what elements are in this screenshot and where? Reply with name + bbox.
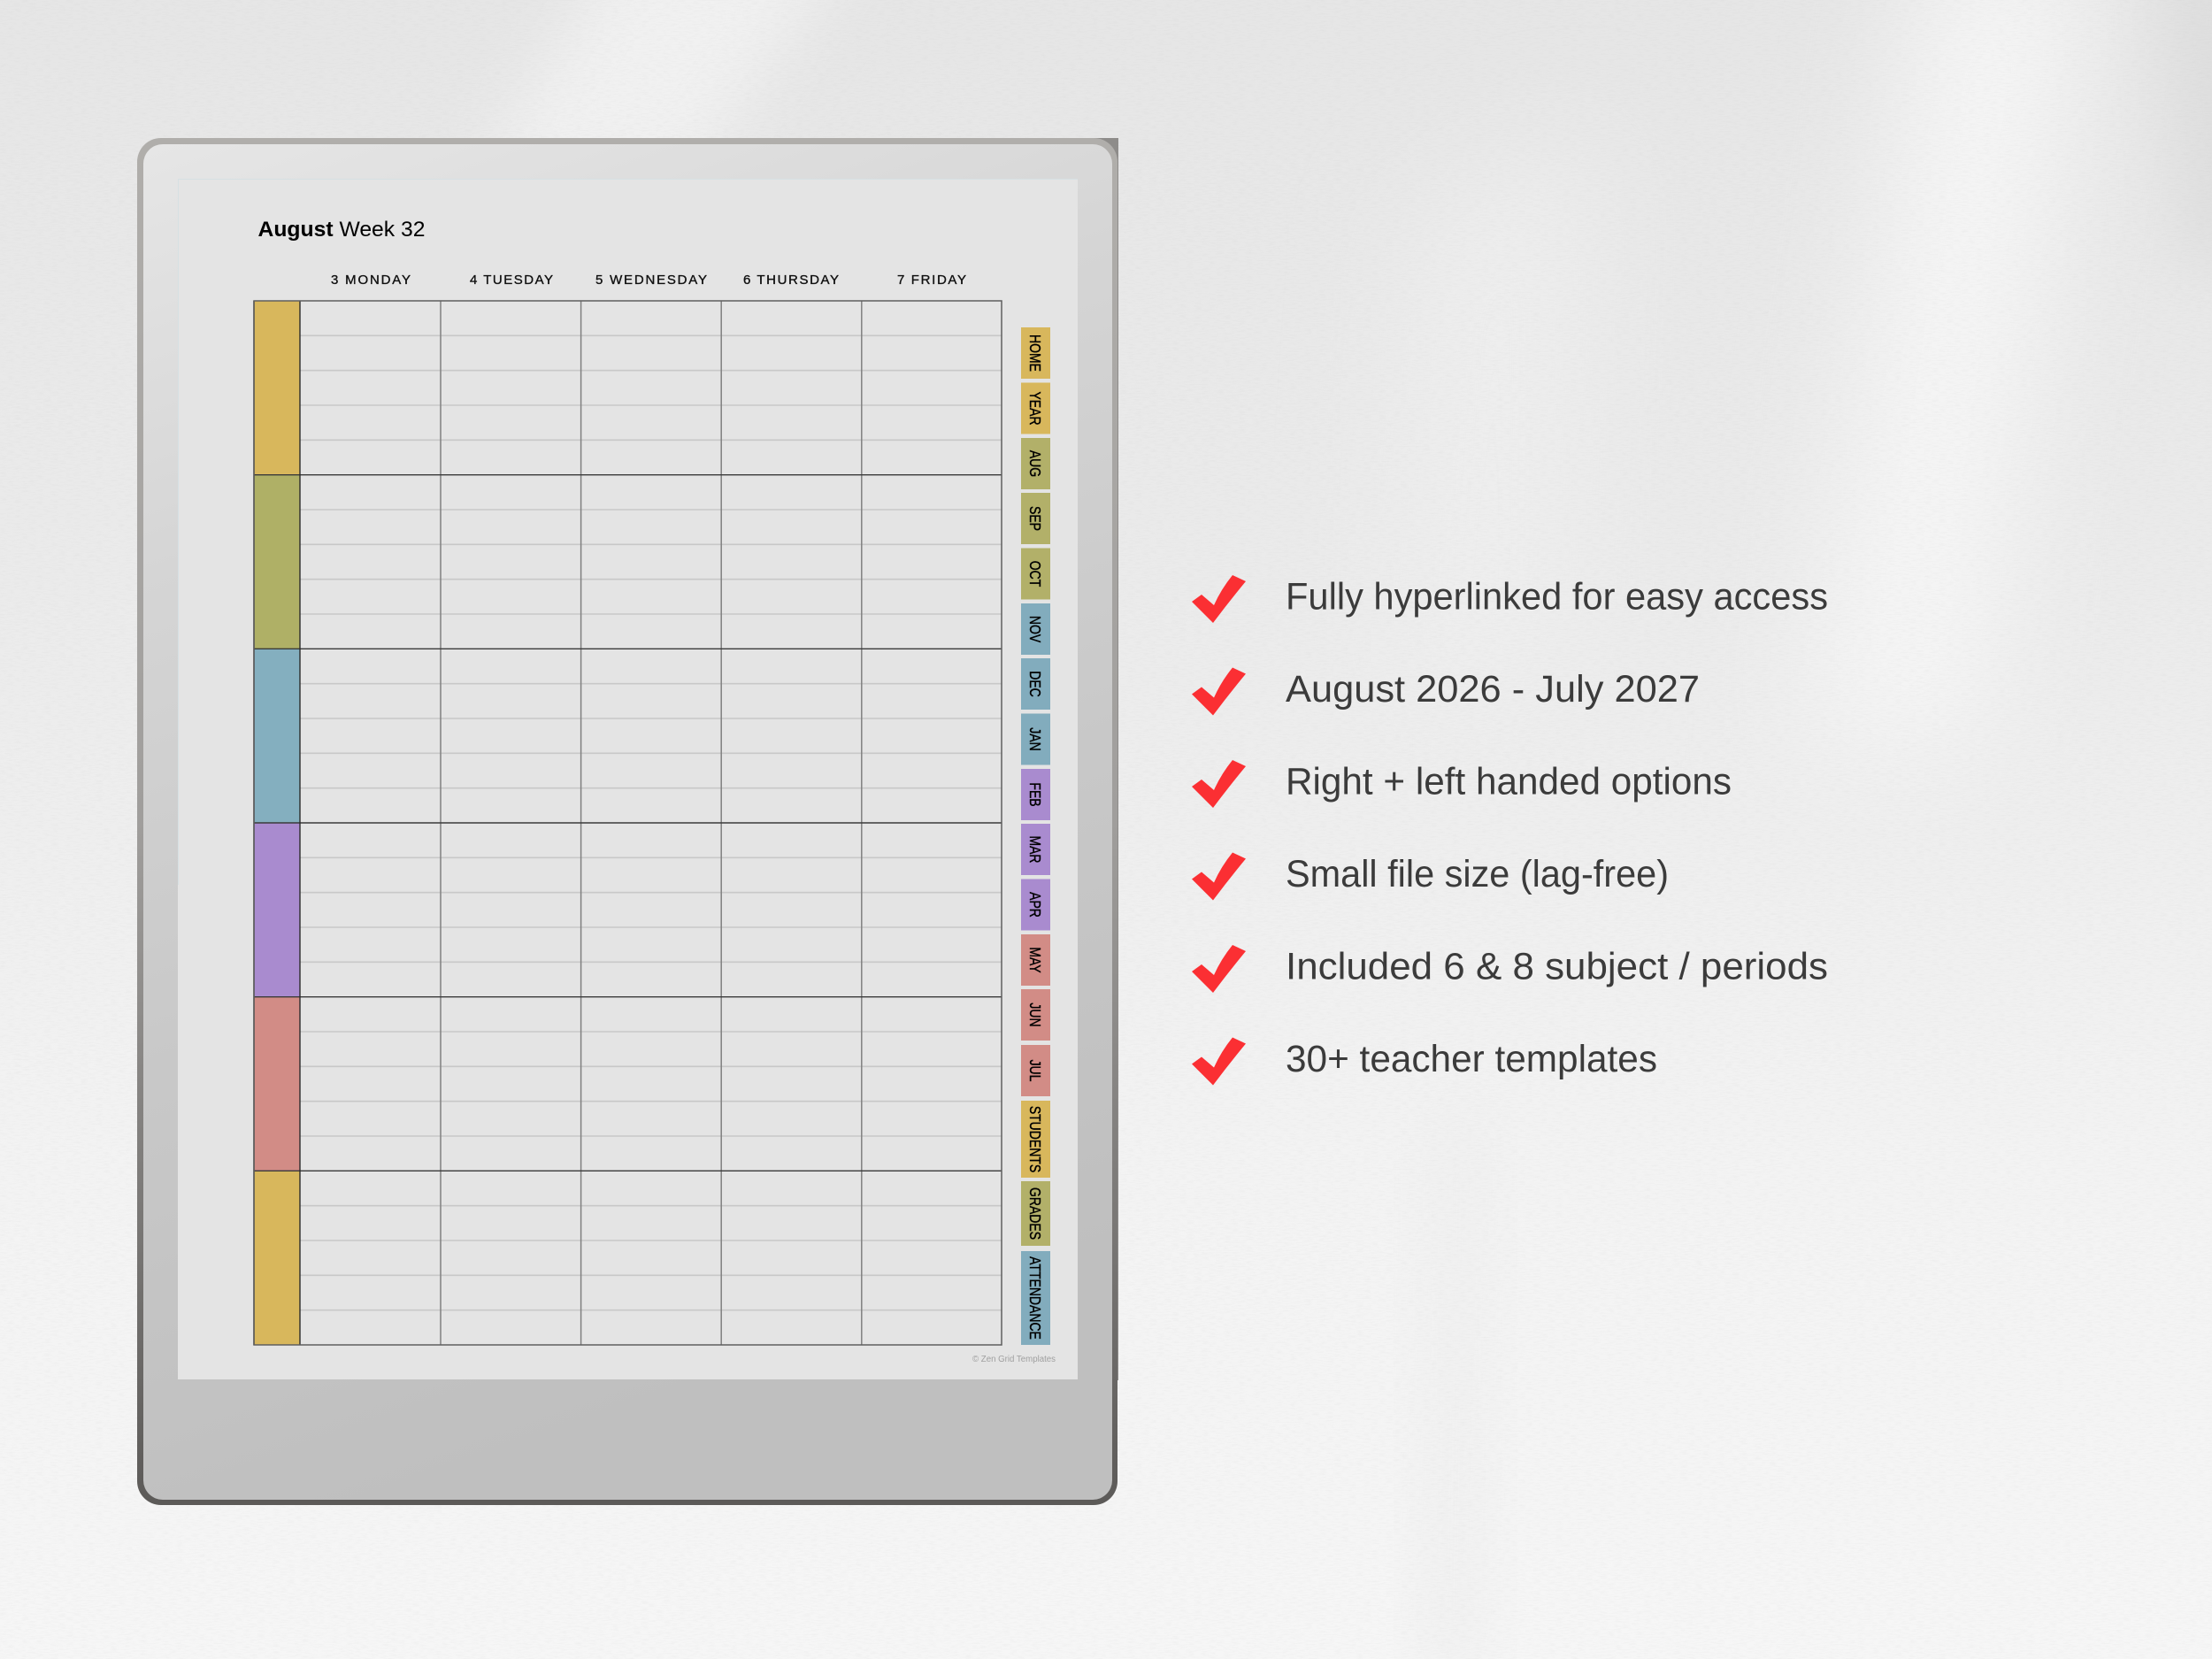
side navigation tabs: JAN	[1026, 727, 1042, 751]
side navigation tabs: HOME	[1026, 334, 1042, 372]
check 2	[1192, 667, 1246, 715]
feature 2: August 2026 - July 2027	[1286, 668, 1700, 710]
side navigation tabs: MAR	[1026, 835, 1042, 864]
copyright note: © Zen Grid Templates	[972, 1355, 1056, 1364]
side navigation tabs: JUL	[1026, 1060, 1042, 1082]
planner page	[178, 179, 1078, 1379]
feature 6: 30+ teacher templates	[1286, 1038, 1657, 1080]
side navigation tabs: NOV	[1026, 616, 1042, 643]
feature checklist	[1192, 575, 1828, 1085]
feature 4: Small file size (lag-free)	[1286, 853, 1669, 895]
weekday headers: 5 WEDNESDAY	[595, 273, 707, 288]
side navigation tabs: FEB	[1026, 782, 1042, 807]
timetable grid	[254, 301, 1002, 1345]
side navigation tabs: MAY	[1026, 947, 1042, 973]
check 1	[1192, 575, 1246, 623]
side navigation tabs: OCT	[1026, 561, 1042, 588]
weekday headers	[331, 273, 966, 288]
check 5	[1192, 945, 1246, 993]
weekday headers: 7 FRIDAY	[897, 273, 966, 288]
title: August Week 32	[258, 218, 425, 242]
side navigation tabs: DEC	[1026, 671, 1042, 697]
side navigation tabs: ATTENDANCE	[1026, 1256, 1042, 1340]
feature 1: Fully hyperlinked for easy access	[1286, 575, 1828, 618]
side navigation tabs: STUDENTS	[1026, 1106, 1042, 1172]
colour row markers	[254, 301, 300, 1345]
feature 5: Included 6 & 8 subject / periods	[1286, 945, 1828, 987]
feature 3: Right + left handed options	[1286, 761, 1732, 803]
weekday headers: 6 THURSDAY	[743, 273, 839, 288]
side navigation tabs: AUG	[1026, 450, 1042, 477]
side navigation tabs: GRADES	[1026, 1187, 1042, 1240]
side navigation tabs: YEAR	[1026, 391, 1042, 426]
side navigation tabs: APR	[1026, 892, 1042, 918]
check 6	[1192, 1037, 1246, 1085]
weekday headers: 4 TUESDAY	[470, 273, 553, 288]
tablet device frame	[137, 138, 1118, 1505]
weekday headers: 3 MONDAY	[331, 273, 411, 288]
side navigation tabs	[1021, 327, 1050, 1345]
side navigation tabs: JUN	[1026, 1002, 1042, 1027]
check 4	[1192, 853, 1246, 901]
side navigation tabs: SEP	[1026, 506, 1042, 531]
check 3	[1192, 760, 1246, 808]
